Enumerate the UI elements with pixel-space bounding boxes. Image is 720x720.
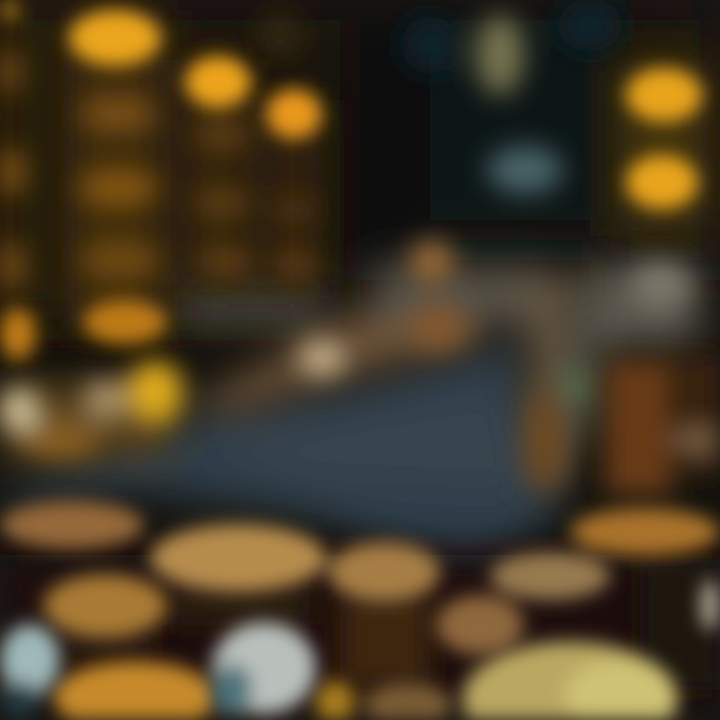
right brown crate stack xyxy=(605,355,720,495)
dim shelf lights xyxy=(0,50,317,289)
large pale yellow coin xyxy=(462,641,678,720)
bright shelf lights xyxy=(0,0,322,360)
foreground coins xyxy=(0,501,720,720)
floor: blue-grey central surface xyxy=(0,340,560,570)
centre-top pale and teal glows xyxy=(258,0,622,194)
left shelves with glowing amber lights xyxy=(0,0,322,360)
highlights in mid-ground xyxy=(0,240,690,490)
right shelves with glowing lights xyxy=(615,60,710,230)
silver coins xyxy=(0,579,720,718)
mid-ground beige stacks and diagonal row xyxy=(0,265,700,485)
shelf columns xyxy=(0,0,322,350)
foreground coin bodies xyxy=(60,560,720,690)
foreground dark base xyxy=(0,555,720,720)
dark background upper area xyxy=(0,0,720,320)
